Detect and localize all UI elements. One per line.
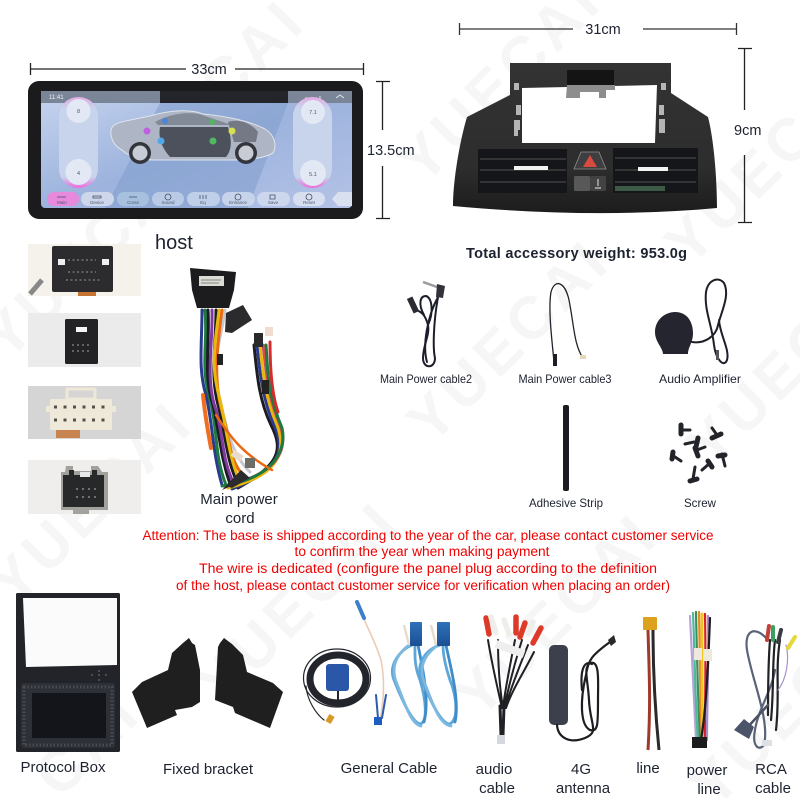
connector photo 2 — [28, 313, 141, 367]
accessory: gps antenna — [304, 649, 370, 724]
accessory: main power cable 2 — [407, 282, 445, 366]
label: main power cable 3: Main Power cable3 — [518, 372, 612, 386]
label: general cable: General Cable — [341, 760, 437, 777]
label: screw: Screw — [684, 496, 716, 510]
accessory: general cables — [357, 602, 456, 726]
harness small connectors — [217, 327, 273, 490]
label: line: line — [636, 760, 660, 777]
hazard button — [574, 152, 606, 169]
right bracket — [215, 638, 283, 728]
accessory: power line harness — [690, 612, 712, 748]
bottom menu buttons: Cross — [127, 200, 140, 205]
accessory: audio amplifier — [655, 280, 728, 363]
connector photo 3 — [28, 386, 141, 439]
dimension: panel width 31cm — [460, 22, 736, 38]
switch buttons — [574, 176, 606, 191]
label: power line: power — [687, 762, 727, 779]
frame clips — [514, 83, 666, 136]
attention notice: to confirm the year when making payment — [294, 544, 550, 559]
left gauge: 8 — [77, 109, 80, 115]
right gauge: 5.1 — [309, 172, 317, 178]
right air vent — [613, 148, 698, 193]
label: rca cable: cable — [755, 780, 791, 797]
left gauge: 4 — [77, 171, 80, 177]
label: audio cable: cable — [479, 780, 515, 797]
connector photo 1 — [28, 244, 141, 296]
label: rca cable — [755, 761, 791, 797]
label: main power cord: Main power — [200, 491, 278, 508]
right gauge — [293, 97, 332, 188]
bottom menu buttons: Eq — [200, 200, 206, 205]
protocol box — [16, 593, 120, 752]
label: 4g antenna — [556, 761, 611, 797]
bottom menu buttons: Device — [90, 200, 104, 205]
label: audio cable: audio — [476, 761, 512, 778]
status bar — [41, 91, 352, 103]
label: 4g antenna: 4G — [571, 761, 591, 778]
attention notice — [142, 528, 714, 593]
left air vent — [478, 149, 567, 193]
accessory: screws — [672, 425, 725, 481]
right gauge: 7.1 — [309, 110, 317, 116]
dimension: screen height 13.5cm — [367, 81, 415, 218]
label: fixed bracket: Fixed bracket — [163, 761, 254, 778]
watermarks: YUECAI — [184, 488, 413, 717]
label: rca cable: RCA — [755, 761, 787, 778]
label: main power cable 2: Main Power cable2 — [380, 372, 472, 386]
accessory: main power cable 3 — [550, 284, 586, 366]
usb cable left — [392, 645, 426, 726]
label: main power cord: cord — [225, 510, 255, 527]
left gauge — [59, 97, 98, 188]
attention notice: of the host, please contact customer service for verification when placing an order) — [176, 578, 670, 593]
harness main plug — [190, 268, 236, 308]
dash trim panel — [453, 63, 717, 213]
accessory: power line pair — [643, 617, 659, 750]
total accessory weight: Total accessory weight: 953.0g — [466, 246, 687, 262]
status bar: 11:41 — [49, 95, 64, 101]
bottom menu buttons: Sound — [161, 200, 175, 205]
dimension: screen width 33cm: 33cm — [191, 62, 227, 78]
label: audio amplifier: Audio Amplifier — [659, 372, 741, 386]
watermarks: YUECAI — [394, 226, 623, 455]
usb cable right — [420, 645, 456, 726]
label: adhesive strip: Adhesive Strip — [529, 496, 603, 510]
dimension: screen width 33cm — [30, 62, 364, 78]
accessory: 4g antenna — [549, 635, 616, 740]
label: protocol box: Protocol Box — [20, 759, 106, 776]
label: main power cord — [200, 491, 278, 527]
fixed bracket pair — [132, 638, 283, 728]
main power harness — [190, 268, 283, 490]
accessory: rca cable — [734, 626, 795, 748]
dimension: panel height 9cm: 9cm — [734, 123, 761, 139]
label: audio cable — [476, 761, 515, 797]
dimension: panel height 9cm — [734, 48, 761, 222]
dimension: panel width 31cm: 31cm — [585, 22, 621, 38]
bottom menu buttons: Main — [57, 200, 67, 205]
screen reflection — [105, 103, 288, 208]
label: power line — [687, 762, 727, 798]
car x-ray — [111, 111, 275, 164]
attention notice: Attention: The base is shipped according to the year of the car, please contact customer service — [142, 528, 714, 543]
harness side plug — [225, 305, 252, 333]
label: power line: line — [697, 781, 721, 798]
head unit screen — [28, 81, 363, 219]
watermarks: YUECAI — [442, 500, 671, 729]
label: 4g antenna: antenna — [556, 780, 611, 797]
connector photo 4 — [28, 460, 141, 514]
rca plugs — [486, 617, 541, 643]
attention notice: The wire is dedicated (configure the panel plug according to the definition — [199, 561, 657, 576]
accessory: audio cable — [486, 617, 541, 744]
thin lead — [357, 602, 386, 720]
bottom menu buttons: Reset — [303, 200, 316, 205]
dimension: screen height 13.5cm: 13.5cm — [367, 143, 415, 159]
left bracket — [132, 638, 200, 728]
bottom menu buttons — [47, 192, 352, 206]
heading: host: host — [155, 232, 193, 254]
accessory: adhesive strip — [563, 405, 569, 491]
bottom menu buttons: Enhance — [229, 200, 247, 205]
bottom menu buttons: Save — [268, 200, 279, 205]
